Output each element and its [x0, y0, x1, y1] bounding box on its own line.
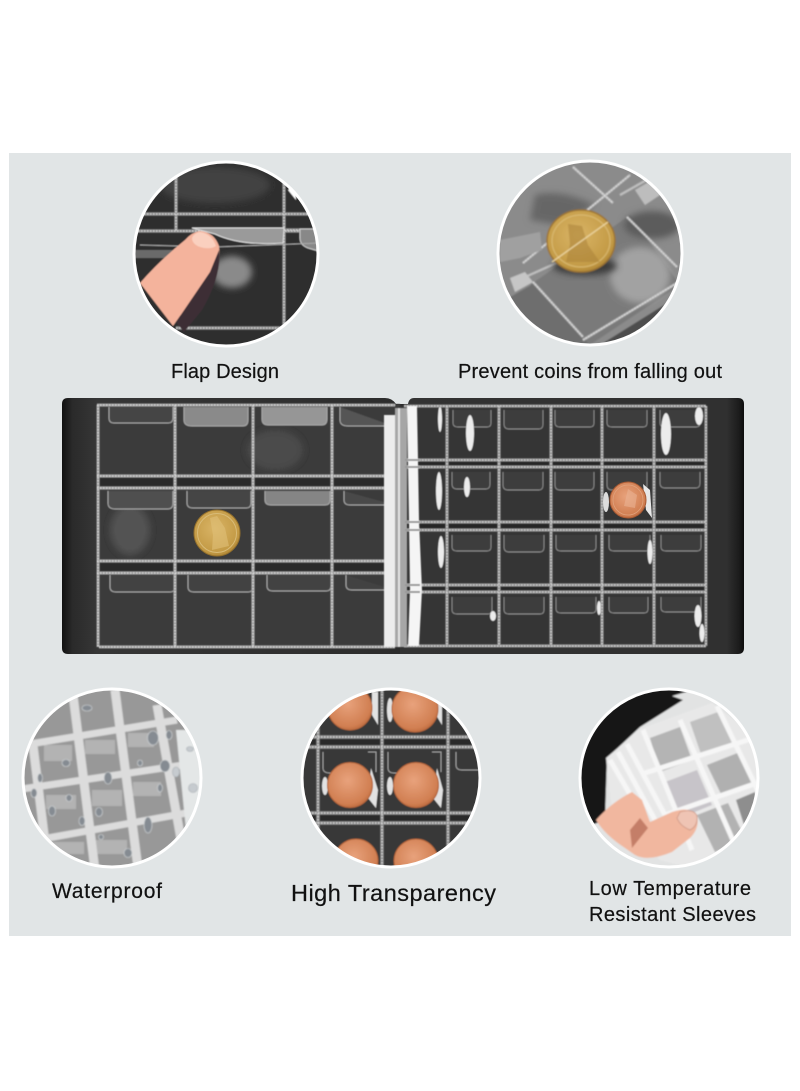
water droplets [31, 705, 172, 858]
label: Prevent coins from falling out: Prevent coins from falling out [458, 361, 722, 383]
lifted flap [192, 228, 284, 244]
background panel [9, 153, 791, 936]
circle: waterproof close-up [20, 685, 210, 870]
label: Low Temperature Resistant Sleeves: Resistant Sleeves [589, 904, 756, 926]
label: Low Temperature Resistant Sleeves: Low Temperature [589, 878, 751, 900]
right page flaps [452, 410, 701, 614]
glare [212, 256, 252, 288]
circle: low temperature sleeves close-up [578, 688, 760, 868]
coin [547, 210, 615, 272]
left page sleeve seams [97, 405, 395, 647]
stack of sleeves [604, 748, 618, 766]
hand [596, 792, 698, 858]
left page flaps [108, 407, 395, 592]
sleeve seams [24, 690, 186, 864]
album left cover [62, 398, 409, 654]
copper coin [603, 482, 652, 518]
right sleeve page [404, 406, 707, 647]
label: High Transparency: High Transparency [291, 880, 496, 906]
binder ring glare [384, 406, 422, 647]
circle: coin held in pocket close-up [496, 160, 684, 346]
label: Waterproof: Waterproof [52, 880, 162, 903]
left sleeve page [97, 404, 400, 647]
album right cover [400, 398, 744, 654]
sleeve seams [610, 706, 760, 850]
open coin album [62, 398, 744, 654]
black album cover [582, 690, 688, 825]
label: Low Temperature Resistant Sleeves [589, 878, 756, 926]
circle: flap design close-up [130, 160, 322, 350]
gold dollar coin [194, 510, 240, 556]
flap pieces [510, 272, 533, 292]
coin shadow [553, 257, 617, 275]
seams [138, 177, 308, 330]
glare beside coins [322, 692, 443, 808]
circle: high transparency close-up [300, 688, 482, 868]
diagonal seams [514, 167, 677, 340]
label: Flap Design: Flap Design [171, 361, 279, 383]
seams [308, 690, 474, 865]
flaps [323, 752, 480, 773]
copper coins [328, 686, 438, 883]
right page glare highlights [436, 406, 704, 642]
right page sleeve seams [404, 406, 706, 646]
finger [140, 231, 219, 326]
